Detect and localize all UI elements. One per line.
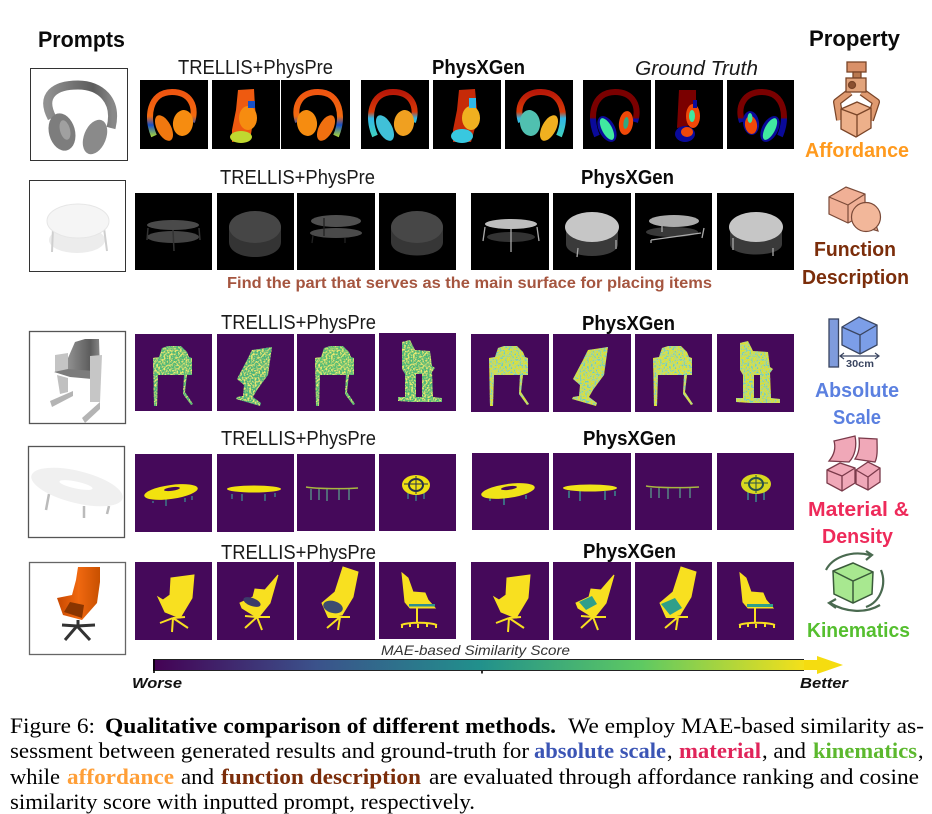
heading: PhysXGen: PhysXGen bbox=[583, 428, 676, 450]
caption line 2 bbox=[10, 738, 924, 763]
arrow head bbox=[800, 656, 843, 674]
similarity map: TRELLIS office chair view 3 bbox=[297, 562, 375, 640]
icon: green cube with rotation arrows bbox=[826, 551, 883, 611]
heatmap: PhysXGen headphones side bbox=[433, 80, 501, 149]
caption line 1: We employ MAE-based similarity as- bbox=[568, 713, 924, 738]
similarity map: PhysXGen table view 3 bbox=[635, 453, 712, 530]
caption line 2: , bbox=[918, 738, 924, 763]
heading: PhysXGen: PhysXGen bbox=[432, 57, 525, 79]
heading: PhysXGen: PhysXGen bbox=[582, 313, 675, 335]
prompt image: headphones bbox=[30, 68, 128, 160]
heading: TRELLIS+PhysPre: TRELLIS+PhysPre bbox=[221, 542, 376, 564]
similarity map: PhysXGen office chair view 1 bbox=[471, 562, 549, 640]
heatmap: TRELLIS table view 2 bbox=[217, 193, 294, 270]
label: description: Description bbox=[802, 266, 909, 289]
caption line 1: Qualitative comparison of different methods. bbox=[105, 713, 556, 738]
property: affordance bbox=[805, 62, 909, 162]
heatmap: TRELLIS table view 4 bbox=[379, 193, 456, 270]
similarity map: PhysXGen table view 4 bbox=[717, 453, 794, 530]
heatmap: TRELLIS headphones mirrored bbox=[281, 80, 350, 149]
label: absolute: Absolute bbox=[815, 379, 899, 402]
text prompt: find the part: Find the part that serves as the main surface for placing items bbox=[227, 275, 712, 292]
icon: claw gripping box bbox=[837, 62, 876, 137]
heatmap: PhysXGen table view 3 bbox=[635, 193, 712, 270]
similarity map: PhysXGen office chair view 4 bbox=[717, 562, 794, 640]
property: material and density bbox=[808, 436, 909, 548]
prompt image: white conference table bbox=[28, 446, 126, 538]
icon: pink material blocks bbox=[827, 436, 880, 491]
similarity map: PhysXGen table view 1 bbox=[472, 453, 549, 530]
property: kinematics bbox=[807, 551, 910, 642]
similarity map: PhysXGen chair view 3 bbox=[635, 334, 712, 412]
caption line 3: are evaluated through affordance ranking and cosine bbox=[429, 764, 919, 789]
similarity map: TRELLIS office chair view 4 bbox=[379, 562, 456, 639]
similarity map: PhysXGen office chair view 2 bbox=[553, 562, 631, 640]
heatmap: PhysXGen headphones front bbox=[361, 80, 429, 149]
caption line 2: material bbox=[679, 738, 761, 763]
icon: ruler and cube 30cm: 30cm bbox=[846, 359, 874, 370]
similarity map: TRELLIS table view 3 bbox=[297, 454, 375, 531]
label: function: Function bbox=[814, 238, 896, 261]
heading: TRELLIS+PhysPre: TRELLIS+PhysPre bbox=[221, 312, 376, 334]
similarity map: TRELLIS chair view 3 bbox=[297, 334, 375, 411]
caption line 3 bbox=[10, 764, 919, 789]
similarity map: TRELLIS chair view 1 bbox=[135, 334, 212, 411]
panel: row 2 function description table bbox=[30, 167, 794, 292]
heading: PhysXGen: PhysXGen bbox=[581, 167, 674, 189]
similarity map: PhysXGen chair view 1 bbox=[471, 334, 549, 412]
similarity map: TRELLIS office chair view 1 bbox=[135, 562, 212, 640]
heatmap: PhysXGen table view 2 bbox=[553, 193, 631, 270]
heatmap: TRELLIS table view 3 bbox=[297, 193, 375, 270]
similarity map: TRELLIS table view 4 bbox=[379, 454, 456, 531]
caption line 1 bbox=[10, 713, 924, 738]
similarity map: PhysXGen table view 2 bbox=[553, 453, 631, 530]
similarity map: TRELLIS chair view 4 bbox=[379, 333, 456, 411]
similarity map: TRELLIS chair view 2 bbox=[217, 334, 294, 411]
caption line 2: absolute scale bbox=[534, 738, 666, 763]
property: function description bbox=[802, 187, 909, 289]
caption line 3: affordance bbox=[67, 764, 174, 789]
heatmap: TRELLIS headphones front bbox=[140, 80, 208, 149]
similarity map: PhysXGen chair view 4 bbox=[717, 334, 794, 412]
heatmap: ground truth headphones mirrored bbox=[727, 80, 794, 149]
panel: row 5 kinematics office chair bbox=[30, 541, 794, 654]
heatmap: TRELLIS table view 1 bbox=[135, 193, 212, 270]
label: kinematics: Kinematics bbox=[807, 619, 910, 642]
heading: Ground Truth: Ground Truth bbox=[635, 58, 758, 80]
similarity map: TRELLIS office chair view 2 bbox=[217, 562, 294, 640]
heatmap: ground truth headphones side bbox=[655, 80, 723, 149]
caption line 3: while bbox=[10, 764, 60, 789]
caption line 4: similarity score with inputted prompt, respectively. bbox=[10, 789, 475, 814]
heading: PhysXGen: PhysXGen bbox=[583, 541, 676, 563]
panel: row 4 material table bbox=[28, 428, 794, 538]
heading: Prompts: Prompts bbox=[38, 27, 125, 52]
caption line 2: , bbox=[667, 738, 672, 763]
prompt image: white round table bbox=[30, 180, 126, 272]
icon: cube and speech bubble bbox=[829, 187, 880, 232]
similarity map: PhysXGen chair view 2 bbox=[553, 334, 631, 412]
label: affordance: Affordance bbox=[805, 139, 909, 162]
heading: TRELLIS+PhysPre: TRELLIS+PhysPre bbox=[178, 57, 333, 79]
scale label: MAE-based Similarity Score bbox=[381, 642, 570, 658]
caption line 3: and bbox=[181, 764, 214, 789]
label: material: Material & bbox=[808, 498, 909, 521]
caption line 2: , and bbox=[762, 738, 806, 763]
heading: TRELLIS+PhysPre: TRELLIS+PhysPre bbox=[220, 167, 375, 189]
caption line 1: Figure 6: bbox=[10, 713, 95, 738]
heatmap: PhysXGen headphones mirrored bbox=[505, 80, 573, 149]
caption line 3: function description bbox=[221, 764, 421, 789]
similarity map: TRELLIS table view 1 bbox=[135, 454, 212, 532]
caption line 2: kinematics bbox=[813, 738, 917, 763]
heatmap: PhysXGen table view 1 bbox=[471, 193, 549, 270]
panel: row 3 absolute scale chair bbox=[30, 312, 794, 424]
heatmap: PhysXGen table view 4 bbox=[717, 193, 794, 270]
caption line 2: sessment between generated results and ground-truth for bbox=[10, 738, 530, 763]
panel: row 1 affordance headphones bbox=[30, 57, 794, 160]
label: scale: Scale bbox=[833, 406, 881, 429]
label: better: Better bbox=[800, 675, 849, 692]
heatmap: TRELLIS headphones side bbox=[212, 80, 280, 149]
label: worse: Worse bbox=[132, 675, 182, 692]
label: density: Density bbox=[822, 525, 894, 548]
caption bbox=[10, 713, 924, 814]
prompt image: orange office chair bbox=[30, 562, 126, 654]
heading: Property: Property bbox=[809, 26, 901, 51]
similarity map: PhysXGen office chair view 3 bbox=[635, 562, 712, 640]
heatmap: ground truth headphones front bbox=[583, 80, 651, 149]
prompt image: gray chair bbox=[30, 332, 126, 424]
gradient bar bbox=[153, 660, 804, 670]
similarity map: TRELLIS table view 2 bbox=[217, 454, 294, 532]
property: absolute scale bbox=[815, 317, 899, 429]
heading: TRELLIS+PhysPre: TRELLIS+PhysPre bbox=[221, 428, 376, 450]
colour scale: MAE-based similarity score bbox=[132, 642, 849, 692]
